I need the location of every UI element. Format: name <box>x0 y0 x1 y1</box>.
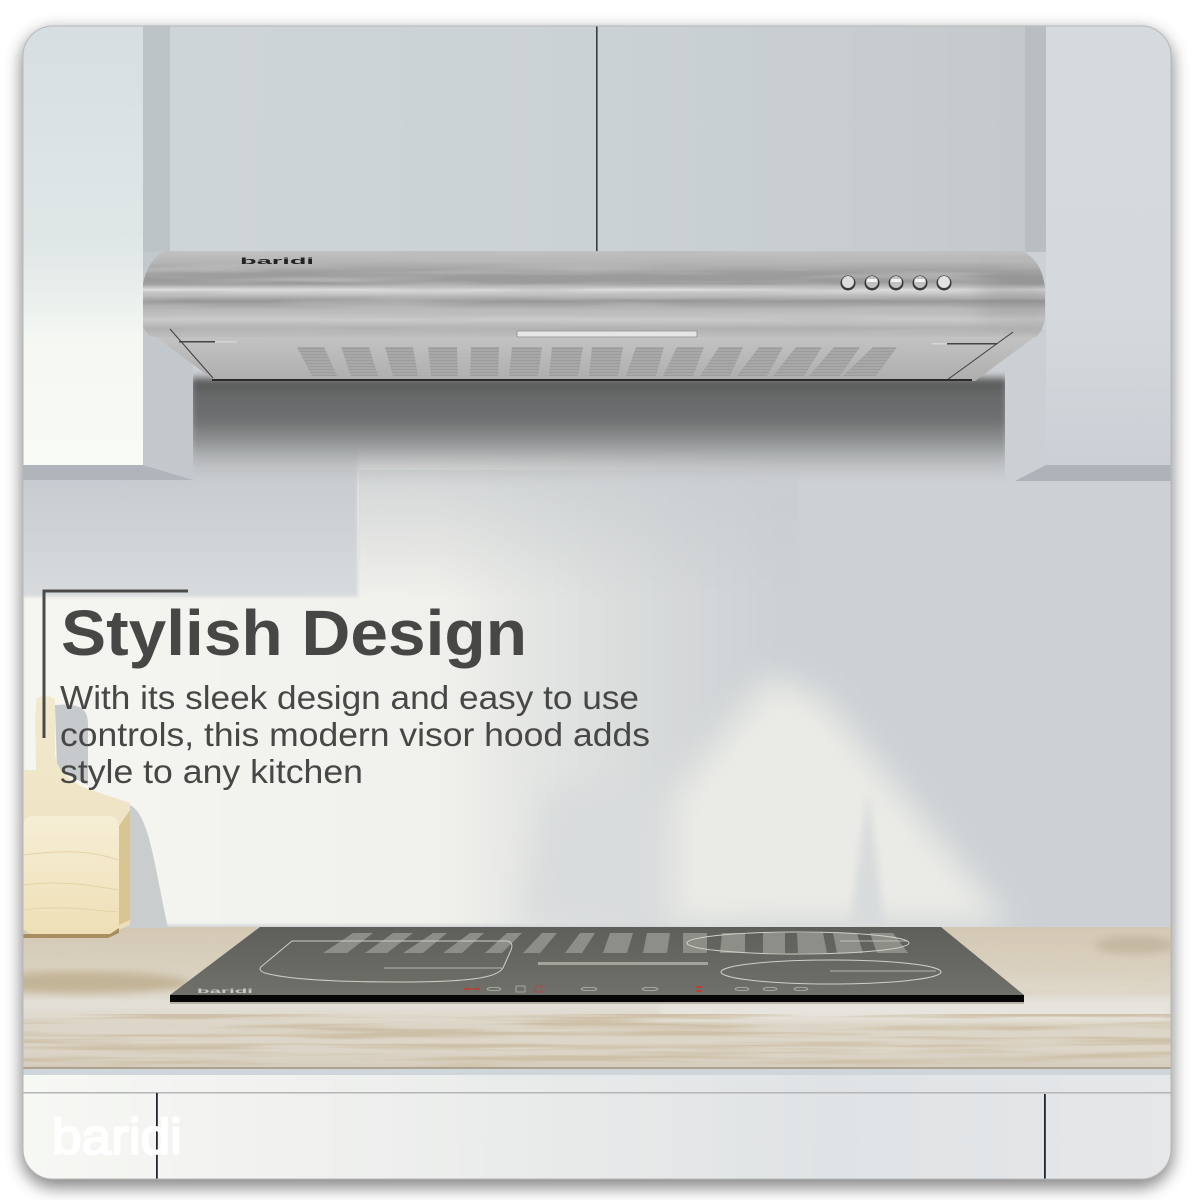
base cabinets <box>23 1069 1171 1179</box>
hood cast shadow on wall <box>190 378 1008 490</box>
body text: With its sleek design and easy to use <box>60 679 639 716</box>
vents <box>297 347 897 376</box>
hood reflection on cooktop <box>323 933 908 953</box>
control knobs <box>840 276 952 290</box>
hood underside <box>147 330 1044 381</box>
cutting boards <box>23 696 168 938</box>
centre bar <box>538 962 708 965</box>
cooktop <box>170 927 1024 1004</box>
heading: Stylish Design <box>61 597 527 669</box>
baridi logo: baridi <box>52 1109 182 1165</box>
body text: controls, this modern visor hood adds <box>60 716 650 753</box>
countertop <box>0 927 1175 1070</box>
light strip <box>517 331 697 337</box>
hood brand: baridi <box>240 256 314 267</box>
upper wall cabinets <box>596 26 1025 252</box>
left cabinet <box>23 26 193 480</box>
hood bottom edge <box>212 379 972 381</box>
hood front cylinder <box>143 251 1045 337</box>
right cabinet <box>1005 26 1171 481</box>
cooktop front edge <box>170 995 1024 1002</box>
controls <box>464 986 808 992</box>
cooking zones <box>260 932 941 984</box>
range hood <box>143 251 1050 381</box>
body text: style to any kitchen <box>60 753 363 790</box>
body text <box>60 679 650 790</box>
back wall <box>24 252 1170 927</box>
wall sunlight patches <box>23 436 1010 925</box>
side brackets <box>170 329 213 378</box>
corner bracket <box>44 591 188 738</box>
cooktop brand: baridi <box>197 988 254 995</box>
